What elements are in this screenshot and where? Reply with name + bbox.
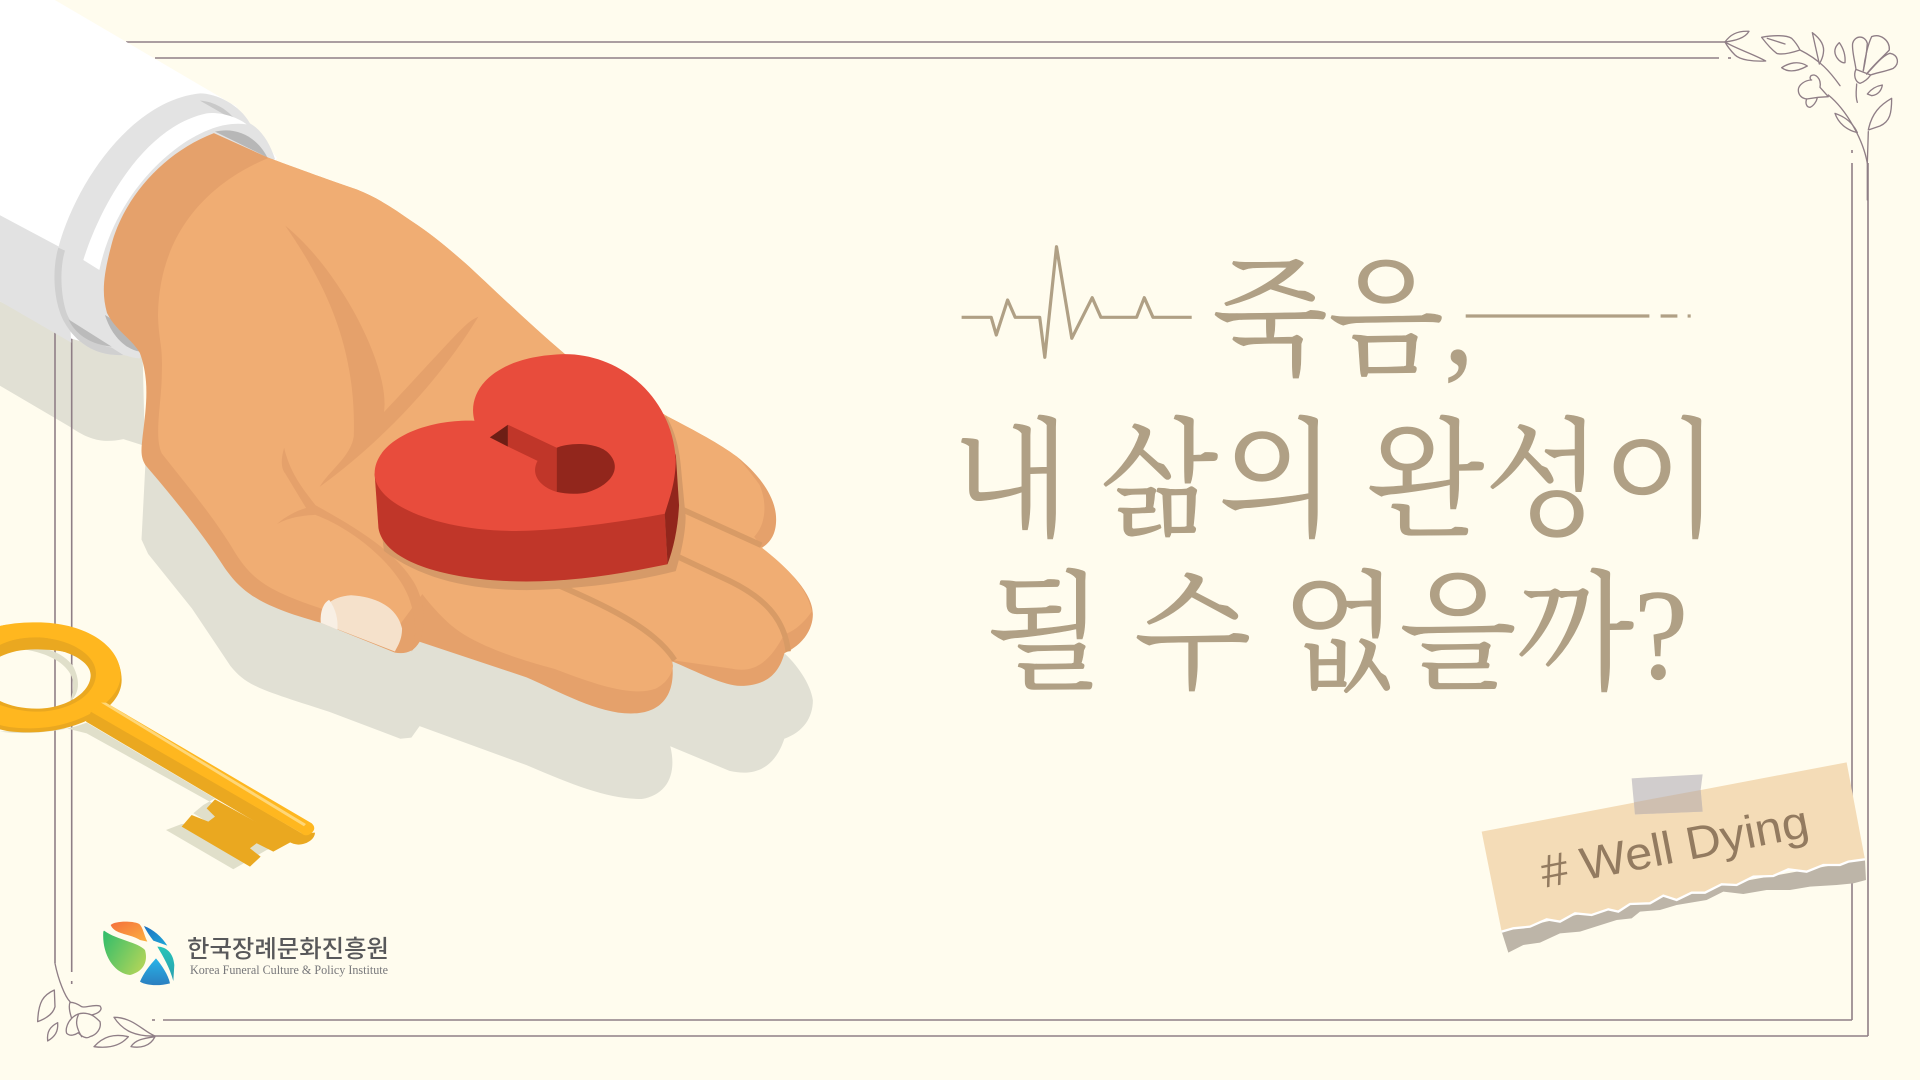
finger separators	[549, 508, 788, 660]
title: 죽음,	[1212, 248, 1474, 391]
hand	[104, 133, 813, 713]
title: 내 삶의 완성이	[952, 410, 1720, 553]
heart shadow on palm	[378, 416, 686, 590]
dashed line after heading	[1466, 314, 1691, 318]
tag text: # Well Dying	[1536, 795, 1813, 898]
thumb crease	[277, 448, 424, 651]
logo name: 한국장례문화진흥원	[187, 936, 389, 963]
heart side wall	[375, 474, 668, 581]
torn edge	[1502, 859, 1865, 932]
key ring	[0, 624, 122, 732]
floral corner: bottom left	[38, 963, 155, 1047]
key bit	[182, 799, 292, 867]
hand shadow	[0, 301, 813, 799]
hand top face	[158, 158, 812, 691]
logo mark	[103, 922, 174, 985]
heart padlock	[375, 354, 679, 581]
logo	[103, 922, 389, 985]
torn paper tag	[1482, 762, 1866, 953]
key shadow	[0, 646, 292, 869]
logo subtitle: Korea Funeral Culture & Policy Institute	[190, 963, 388, 977]
golden key	[0, 622, 315, 869]
thumb nail	[321, 595, 402, 651]
key shaft	[86, 711, 315, 845]
palm crease	[285, 226, 478, 487]
heart top face	[375, 354, 676, 531]
paper shadow	[1502, 859, 1866, 953]
tape	[1632, 774, 1703, 814]
floral corner: top right	[1725, 31, 1897, 200]
sleeve underside	[0, 215, 71, 343]
heartbeat line	[962, 247, 1192, 357]
title	[952, 248, 1720, 706]
keyhole	[490, 425, 615, 494]
hand silhouette	[104, 133, 813, 713]
shirt cuff	[54, 93, 275, 358]
paper	[1482, 762, 1865, 932]
shirt sleeve	[0, 0, 277, 357]
title: 될 수 없을까?	[986, 563, 1688, 706]
